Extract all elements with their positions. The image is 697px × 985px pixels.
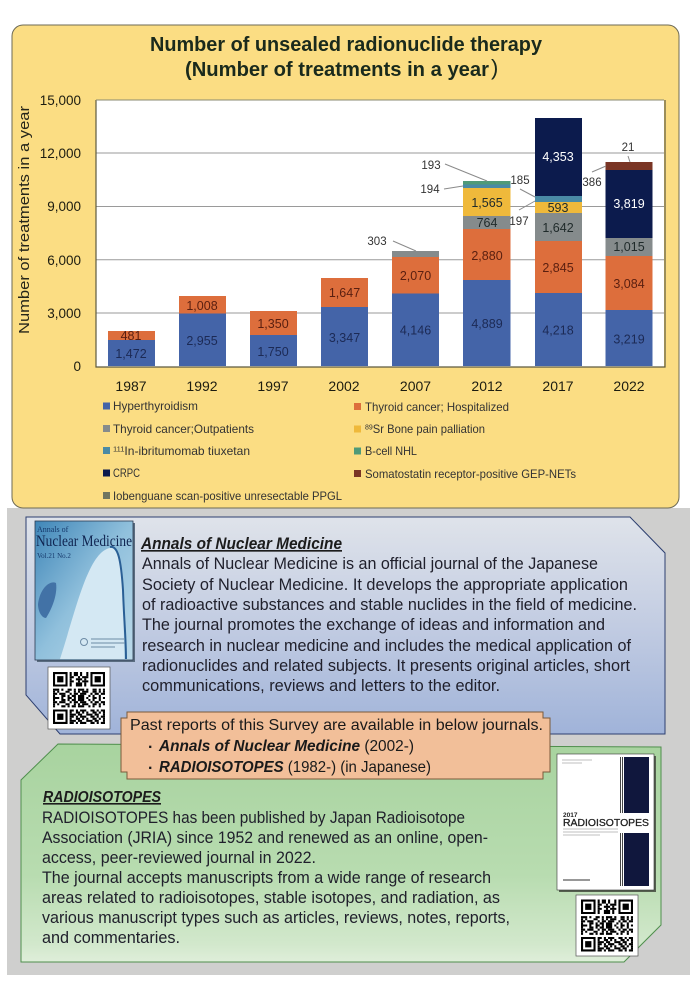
bar: 1997 — [250, 311, 297, 366]
legend: In-ibritumomab tiuxetan — [124, 444, 250, 458]
description: various manuscript types such as articles, reviews, notes, reports, — [42, 909, 510, 927]
title: Number of unsealed radionuclide therapy — [150, 33, 543, 56]
callout: past reports: Past reports of this Survey are available in below journals. — [130, 717, 543, 734]
journal cover: Annals of Nuclear Medicine: Vol.21 No.2 — [37, 552, 71, 560]
callout: past reports: · — [148, 760, 153, 777]
description — [42, 809, 510, 947]
description: of radioactive substances and stable nuclides in the field of medicine. — [142, 596, 637, 614]
legend: Sr Bone pain palliation — [373, 422, 485, 436]
legend — [103, 399, 576, 503]
description: radionuclides and related subjects. It presents original articles, short — [142, 657, 631, 675]
bar: 2007: 2,070 — [400, 269, 431, 283]
bar: 2017: 4,353 — [542, 150, 574, 164]
bar: 2017: 593 — [548, 201, 568, 215]
legend: Thyroid cancer;Outpatients — [113, 422, 254, 436]
callout: past reports — [121, 712, 550, 779]
bar: 2012: 1,565 — [471, 196, 503, 210]
y axis tick labels: 12,000 — [40, 146, 81, 161]
journal cover: RADIOISOTOPES: 2017 — [563, 812, 578, 819]
bar: 2007 — [392, 251, 439, 366]
bar: 2017: 4,218 — [542, 324, 574, 338]
bar: 1987: 1,472 — [115, 347, 147, 361]
background panel: lower gray area — [7, 508, 690, 975]
bar: 2012 — [463, 181, 510, 366]
callout labels with leader lines: 303 — [367, 236, 387, 248]
legend: Somatostatin receptor-positive GEP-NETs — [365, 467, 576, 481]
x axis year labels: 2002 — [328, 378, 360, 394]
legend: Thyroid cancer; Hospitalized — [365, 400, 509, 414]
bar: 2012: 764 — [477, 216, 497, 230]
y axis title: Number of treatments in a year — [17, 106, 33, 334]
callout: past reports: · — [148, 739, 153, 756]
bar: 1992: 2,955 — [186, 334, 218, 348]
heading: Annals of Nuclear Medicine — [140, 535, 342, 553]
stacked bar chart — [96, 100, 665, 367]
bar: 2022: 3,084 — [613, 277, 645, 291]
bar: 2007: 4,146 — [400, 324, 431, 338]
x axis year labels: 2017 — [542, 378, 574, 394]
y axis tick labels: 3,000 — [47, 306, 81, 321]
bar: 1987 — [108, 329, 155, 366]
description: The journal promotes the exchange of ideas and information and — [142, 616, 605, 634]
x axis year labels: 2007 — [400, 378, 431, 394]
bar: 2002 — [321, 278, 368, 366]
bar: 2022 — [606, 162, 652, 366]
panel: RADIOISOTOPES — [21, 744, 661, 962]
bar: 2017 — [535, 118, 582, 366]
y axis tick labels: 9,000 — [47, 199, 81, 214]
y axis tick labels — [40, 93, 81, 374]
bar: 2017: 2,845 — [542, 261, 574, 275]
journal cover: Annals of Nuclear Medicine — [35, 521, 135, 662]
bar: 2002: 3,347 — [329, 331, 360, 345]
description: Society of Nuclear Medicine. It develops the appropriate application — [142, 576, 628, 594]
legend: Hyperthyroidism — [113, 399, 198, 413]
bar: 1997: 1,750 — [257, 345, 289, 359]
x axis year labels: 2022 — [613, 378, 645, 394]
legend: 89 — [365, 422, 373, 432]
x axis year labels — [115, 378, 645, 394]
x axis year labels: 1992 — [186, 378, 218, 394]
bar: 2022: 3,819 — [613, 197, 645, 211]
callout labels with leader lines: 197 — [509, 216, 529, 228]
journal cover: RADIOISOTOPES: RADIOISOTOPES — [563, 817, 649, 829]
bar: 1992: 1,008 — [186, 299, 218, 313]
y axis tick labels: 6,000 — [47, 253, 81, 268]
callout labels with leader lines: 193 — [421, 160, 441, 172]
y axis tick labels: 15,000 — [40, 93, 81, 108]
callout labels with leader lines: 194 — [420, 184, 440, 196]
description: RADIOISOTOPES has been published by Japan Radioisotope — [42, 809, 465, 827]
legend: 111 — [113, 444, 124, 454]
description: communications, reviews and letters to the editor. — [142, 677, 500, 695]
bar: 2002: 1,647 — [329, 286, 360, 300]
panel: yearly chart on yellow card — [12, 25, 679, 508]
bar: 2022: 1,015 — [613, 240, 645, 254]
legend: Iobenguane scan-positive unresectable PPGL — [113, 489, 342, 503]
callout labels with leader lines: 21 — [622, 142, 634, 154]
panel: Annals of Nuclear Medicine — [26, 517, 665, 734]
journal cover: Annals of Nuclear Medicine: Nuclear Medicine — [36, 533, 132, 550]
bar: 2017: 1,642 — [542, 221, 574, 235]
callout labels with leader lines: 185 — [510, 175, 530, 187]
bar: 2012: 2,880 — [471, 249, 503, 263]
description: areas related to radioisotopes, stable isotopes, and radiation, as — [42, 889, 500, 907]
bar: 1987: 481 — [121, 329, 141, 343]
bar: 1997: 1,350 — [257, 317, 289, 331]
legend: CRPC — [113, 466, 140, 480]
description: and commentaries. — [42, 929, 180, 947]
x axis year labels: 1987 — [115, 378, 147, 394]
heading: RADIOISOTOPES — [43, 789, 161, 806]
subtitle: (Number of treatments in a year — [185, 58, 489, 81]
bar: 1992 — [179, 296, 226, 366]
legend: B-cell NHL — [365, 444, 417, 458]
x axis year labels: 1997 — [257, 378, 289, 394]
description: Association (JRIA) since 1952 and renewed as an online, open- — [42, 829, 488, 847]
x axis year labels: 2012 — [471, 378, 503, 394]
bar: 2022: 3,219 — [613, 332, 645, 346]
QR code: RADIOISOTOPES — [576, 895, 638, 956]
QR code: Annals of Nuclear Medicine — [48, 667, 110, 729]
subtitle: ) — [491, 55, 498, 80]
description — [142, 555, 637, 695]
journal cover: Annals of Nuclear Medicine: Annals of — [37, 525, 69, 534]
journal cover: RADIOISOTOPES — [557, 754, 656, 892]
callout labels with leader lines — [367, 142, 634, 251]
description: research in nuclear medicine and includes the medical application of — [142, 637, 631, 655]
callout: past reports: RADIOISOTOPES (1982-) (in Japanese) — [159, 759, 431, 776]
callout: past reports: Annals of Nuclear Medicine (2002-) — [158, 738, 414, 755]
description: access, peer-reviewed journal in 2022. — [42, 849, 316, 867]
bar: 2012: 4,889 — [471, 317, 503, 331]
description: The journal accepts manuscripts from a wide range of research — [42, 869, 491, 887]
y axis tick labels: 0 — [73, 359, 81, 374]
description: Annals of Nuclear Medicine is an official journal of the Japanese — [142, 555, 598, 573]
callout labels with leader lines: 386 — [582, 177, 602, 189]
